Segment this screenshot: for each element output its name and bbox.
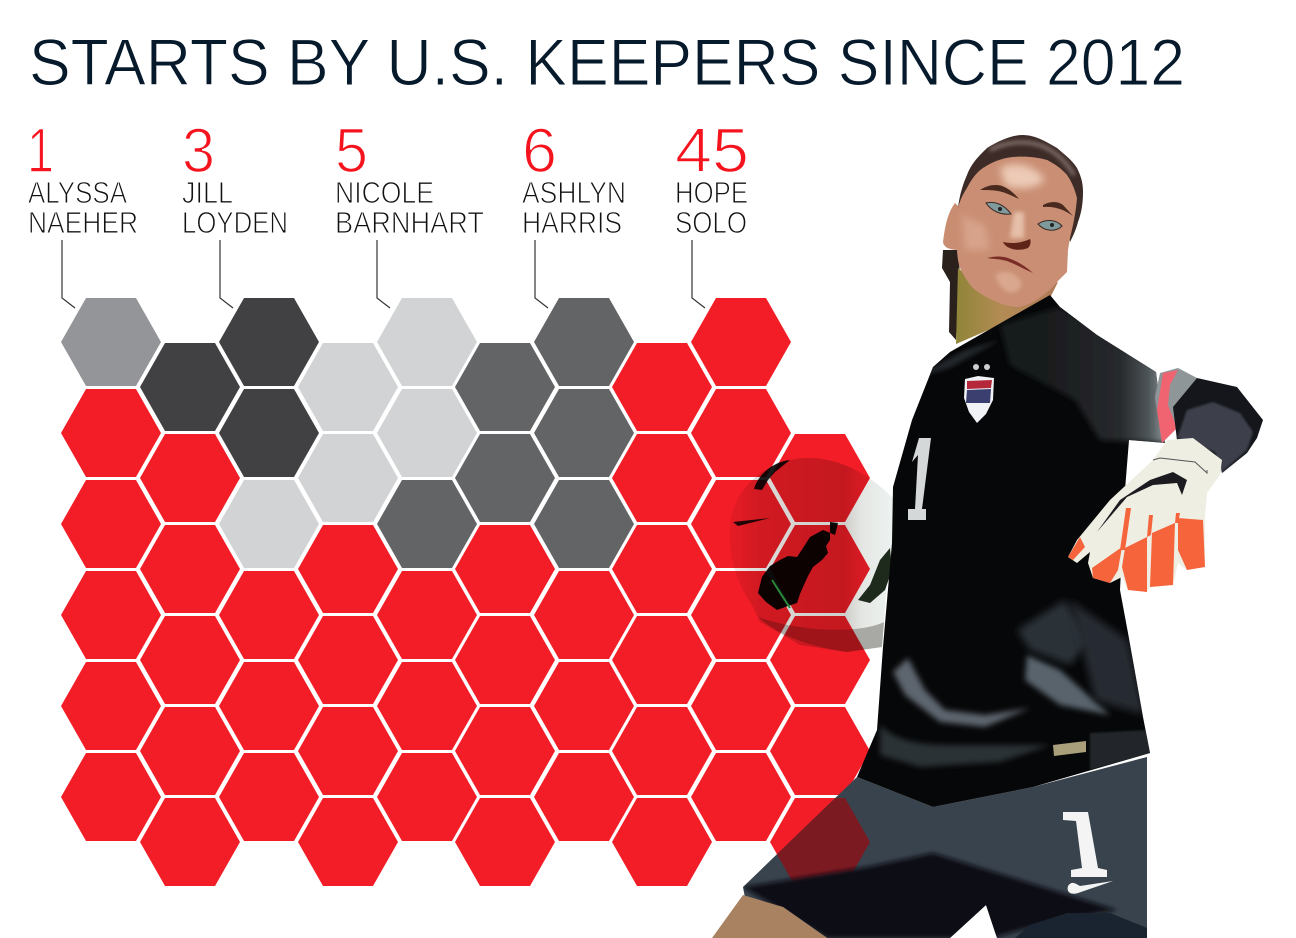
thigh bbox=[712, 895, 827, 938]
hexagons: Barnhart starts bbox=[219, 298, 477, 568]
keeper label: Alyssa Naeher, 1 start: NAEHER bbox=[28, 206, 138, 240]
keeper label: Hope Solo, 45 starts: HOPE bbox=[675, 176, 748, 210]
hexagon seen through the shorts bbox=[777, 798, 870, 882]
ear bbox=[943, 203, 962, 250]
title: STARTS BY U.S. KEEPERS SINCE 2012 bbox=[29, 25, 1185, 99]
keeper label: Hope Solo, 45 starts: 45 bbox=[675, 116, 749, 186]
hexagon: Naeher start bbox=[61, 298, 161, 386]
eyes bbox=[986, 202, 1062, 230]
keeper label: Jill Loyden, 3 starts: 3 bbox=[182, 116, 215, 186]
neck bbox=[956, 268, 1058, 344]
ball overlapping the hexagons bbox=[730, 458, 895, 652]
jersey stars bbox=[973, 364, 990, 370]
keeper label: Alyssa Naeher, 1 start bbox=[27, 116, 138, 308]
jersey crest bbox=[964, 376, 994, 423]
keeper label: Nicole Barnhart, 5 starts: 5 bbox=[335, 116, 368, 186]
keeper label: Ashlyn Harris, 6 starts bbox=[522, 116, 626, 308]
undersleeve bbox=[1173, 378, 1263, 473]
jersey torso bbox=[857, 295, 1165, 807]
glove bbox=[1068, 438, 1222, 592]
keeper label: Jill Loyden, 3 starts bbox=[182, 116, 288, 308]
keeper label: Hope Solo, 45 starts bbox=[675, 116, 749, 308]
keeper label: Hope Solo, 45 starts: SOLO bbox=[675, 206, 747, 240]
hair behind the neck bbox=[942, 250, 960, 340]
eyebrows bbox=[980, 185, 1019, 199]
hexagon chart: one hexagon per start bbox=[61, 298, 870, 886]
glove fingers bbox=[1068, 508, 1205, 592]
ball logo on the right side bbox=[858, 548, 892, 603]
shorts number 1 bbox=[1063, 812, 1107, 877]
keeper label: Ashlyn Harris, 6 starts: 6 bbox=[522, 116, 557, 186]
hair bbox=[958, 135, 1083, 242]
player illustration: goalkeeper throwing the ball bbox=[712, 135, 1263, 938]
jersey number 1 bbox=[908, 438, 931, 520]
hexagons: Harris starts bbox=[377, 298, 634, 568]
keeper label: Nicole Barnhart, 5 starts: NICOLE bbox=[335, 176, 434, 210]
nose bbox=[1003, 239, 1031, 250]
keeper label: Jill Loyden, 3 starts: LOYDEN bbox=[182, 206, 288, 240]
face bbox=[957, 157, 1077, 307]
keeper label: Nicole Barnhart, 5 starts bbox=[335, 116, 484, 308]
mouth bbox=[987, 256, 1033, 273]
jersey tag bbox=[1053, 741, 1086, 756]
keeper label: Jill Loyden, 3 starts: JILL bbox=[182, 176, 233, 210]
sleeve band bbox=[1155, 368, 1197, 443]
keeper label: Ashlyn Harris, 6 starts: HARRIS bbox=[522, 206, 622, 240]
jersey highlights bbox=[880, 307, 1170, 770]
keeper label: Ashlyn Harris, 6 starts: ASHLYN bbox=[522, 176, 626, 210]
shorts bbox=[743, 757, 1147, 938]
hexagons: Solo starts bbox=[61, 298, 870, 886]
keeper label: Nicole Barnhart, 5 starts: BARNHART bbox=[335, 206, 484, 240]
keeper label: Alyssa Naeher, 1 start: ALYSSA bbox=[28, 176, 128, 210]
shorts swoosh bbox=[1068, 881, 1113, 894]
hexagons: Loyden starts bbox=[140, 298, 319, 477]
shorts shadow bbox=[743, 853, 1147, 938]
keeper label: Alyssa Naeher, 1 start: 1 bbox=[27, 116, 54, 186]
